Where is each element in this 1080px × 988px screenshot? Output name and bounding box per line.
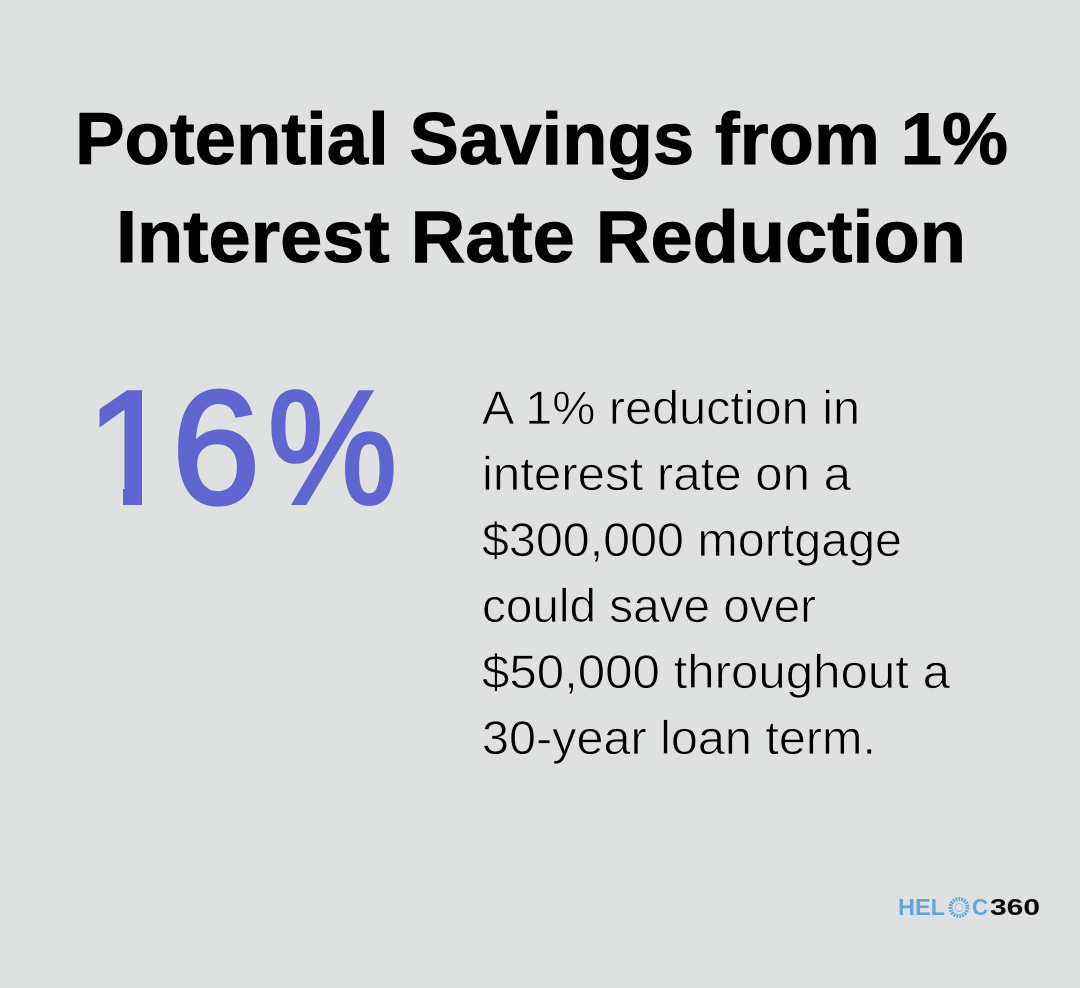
description text block: A 1% reduction in [482,381,860,434]
description text block: $300,000 mortgage [482,513,902,566]
description text block: $50,000 throughout a [482,645,951,698]
logo: HELOC360 [898,894,1040,920]
big statistic: 16%: 1 [86,358,176,538]
big statistic: 16%: 6 [172,358,260,538]
big statistic: 16% [100,388,394,507]
description text block: 30-year loan term. [482,711,876,764]
title: Interest Rate Reduction [116,197,966,278]
description text block: could save over [482,579,816,632]
description text block: interest rate on a [482,447,852,500]
icon: swirl letter O [950,899,968,916]
description text block [482,381,951,764]
infographic canvas [79,110,1039,918]
title: Potential Savings from 1% [75,99,1008,180]
logo: HELOC360: C [972,894,988,920]
logo: HELOC360: HEL [898,894,945,920]
title [75,99,1008,278]
logo: HELOC360: 360 [990,894,1040,920]
big statistic: 16%: % [268,358,397,538]
